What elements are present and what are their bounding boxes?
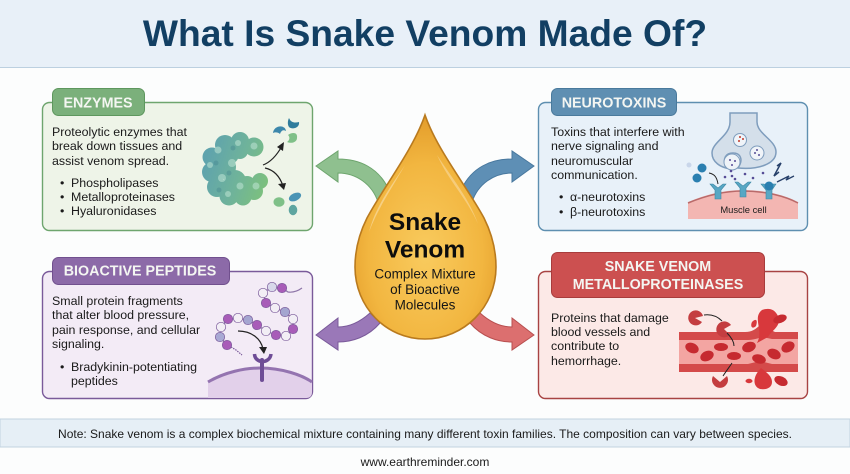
enzymes text: • (60, 204, 64, 218)
drop subtitle: Complex Mixture (374, 266, 476, 282)
metalloproteinases text: Proteins that damage (551, 311, 669, 325)
enzymes text: • (60, 190, 64, 204)
panel: bioactive peptides (42, 258, 312, 398)
venom drop (355, 115, 496, 339)
panel: snake venom metalloproteinases (538, 252, 808, 398)
heading: neurotoxins (552, 88, 676, 116)
enzymes text: Phospholipases (71, 176, 158, 190)
peptides text: Small protein fragments (52, 294, 183, 308)
heading: neurotoxins: NEUROTOXINS (562, 96, 666, 112)
neurotoxins text: Toxins that interfere with (551, 125, 685, 139)
peptides text (52, 294, 200, 388)
metalloproteinases text (551, 311, 669, 368)
heading: snake venom metalloproteinases: SNAKE VENOM (605, 259, 711, 275)
metalloproteinases text: hemorrhage. (551, 354, 621, 368)
icon: synapse and muscle cell: Muscle cell (720, 204, 767, 215)
neurotoxins text: • (559, 205, 563, 219)
icon: peptide chain and receptor (208, 282, 312, 398)
peptides text: pain response, and cellular (52, 323, 200, 337)
venom drop: Venom (385, 236, 465, 264)
heading: enzymes: ENZYMES (63, 96, 133, 112)
drop heading: Snake (389, 209, 461, 236)
neurotoxins text: • (559, 190, 563, 204)
enzymes text: Metalloproteinases (71, 190, 175, 204)
arrow: to metalloproteinases (470, 313, 534, 350)
enzymes text: assist venom spread. (52, 154, 169, 168)
peptides text: peptides (71, 374, 118, 388)
peptides text: • (60, 360, 64, 374)
panel: neurotoxins (538, 88, 808, 230)
neurotoxins text: β-neurotoxins (570, 205, 645, 219)
peptides text: that alter blood pressure, (52, 308, 189, 322)
icon: damaged blood vessel (679, 309, 798, 389)
metalloproteinases text: contribute to (551, 339, 619, 353)
enzymes text: • (60, 176, 64, 190)
note bar (0, 419, 850, 447)
title banner (0, 0, 850, 68)
heading: bioactive peptides: BIOACTIVE PEPTIDES (64, 264, 216, 280)
neurotoxins text: communication. (551, 168, 638, 182)
heading: enzymes (52, 88, 144, 116)
arrow: to bioactive peptides (316, 313, 380, 350)
drop subtitle: Molecules (395, 298, 456, 312)
enzymes text (52, 125, 188, 218)
title: What Is Snake Venom Made Of? (143, 12, 707, 54)
heading: bioactive peptides (52, 258, 230, 284)
enzymes text: Hyaluronidases (71, 204, 156, 218)
arrow: to enzymes (316, 151, 388, 202)
icon: enzyme breaking down (202, 118, 302, 215)
peptides text: Bradykinin-potentiating (71, 360, 197, 374)
arrow: to neurotoxins (462, 151, 534, 202)
neurotoxins text: α-neurotoxins (570, 190, 645, 204)
peptides text: signaling. (52, 337, 104, 351)
metalloproteinases text: blood vessels and (551, 325, 650, 339)
icon: synapse and muscle cell (686, 113, 798, 219)
drop subtitle (374, 266, 476, 312)
enzymes text: break down tissues and (52, 139, 182, 153)
neurotoxins text (551, 125, 685, 219)
neurotoxins text: nerve signaling and (551, 139, 659, 153)
heading: snake venom metalloproteinases (552, 252, 764, 298)
note text: Note: Snake venom is a complex biochemical mixture containing many different toxin families. The composition can vary between species. (58, 427, 792, 441)
heading: snake venom metalloproteinases: METALLOPROTEINASES (573, 277, 743, 293)
enzymes text: Proteolytic enzymes that (52, 125, 188, 139)
neurotoxins text: neuromuscular (551, 154, 633, 168)
drop subtitle: of Bioactive (390, 282, 460, 297)
website: www.earthreminder.com (360, 455, 489, 469)
panel: enzymes (42, 88, 312, 230)
